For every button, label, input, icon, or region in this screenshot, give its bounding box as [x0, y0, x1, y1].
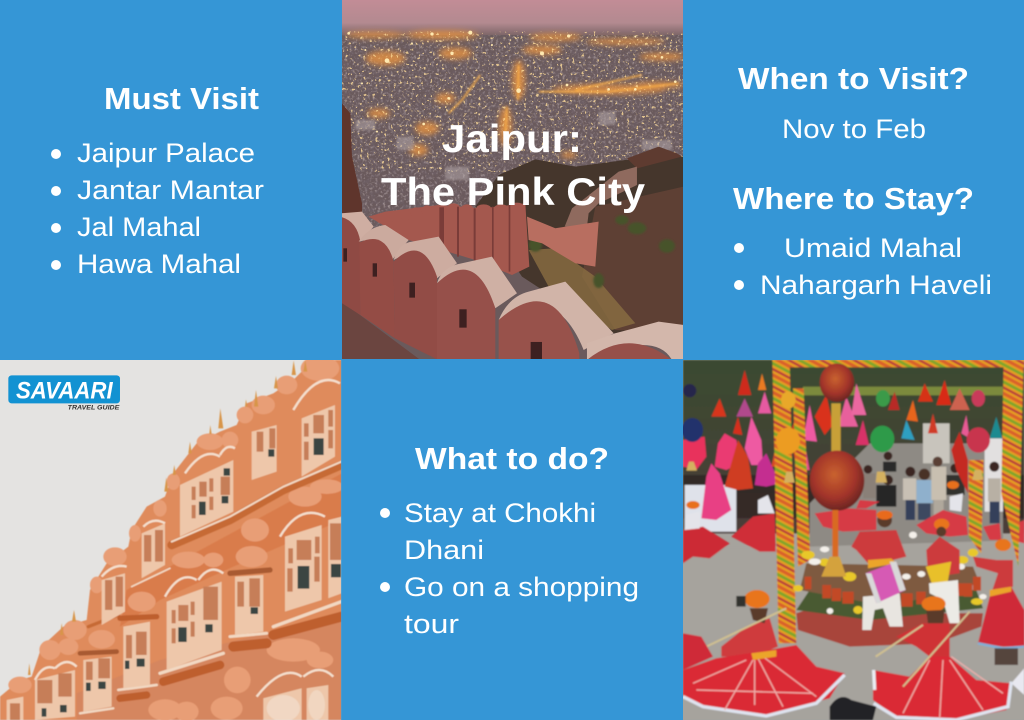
logo: Savaari travel guide: SAVAARI — [16, 378, 114, 405]
logo: Savaari travel guide: TRAVEL GUIDE — [68, 405, 120, 412]
hanging puppets — [683, 370, 1019, 520]
distant wall — [627, 147, 682, 168]
list: must visit places: Jantar Mantar — [77, 175, 264, 205]
list: activities: tour — [404, 609, 459, 639]
heading: when to visit: When to Visit? — [738, 61, 969, 96]
hillside — [475, 157, 683, 333]
panel: when and where — [733, 61, 992, 300]
photo: Rajasthani folk dancers — [682, 360, 1024, 720]
title: The Pink City — [381, 171, 645, 214]
panel: Hawa Mahal photo — [0, 356, 343, 720]
text: visit months: Nov to Feb — [782, 114, 926, 144]
heading: must visit: Must Visit — [104, 81, 259, 116]
list: must visit places: Jal Mahal — [77, 212, 201, 242]
list: hotels — [734, 233, 992, 300]
list: hotels: Nahargarh Haveli — [760, 270, 992, 300]
panel: must visit — [51, 81, 264, 279]
list: activities — [380, 498, 639, 639]
list: must visit places: Jaipur Palace — [77, 138, 255, 168]
dark window openings — [42, 438, 341, 717]
title: Jaipur: — [442, 118, 582, 161]
panel: city photo with title — [342, 0, 685, 360]
finials — [28, 360, 307, 675]
crowd — [863, 452, 1001, 523]
panel: festival dancers photo — [682, 360, 1024, 720]
list: activities: Stay at Chokhi — [404, 498, 596, 528]
heading: what to do: What to do? — [415, 441, 609, 476]
right dancer — [973, 539, 1024, 695]
list: hotels: Umaid Mahal — [784, 233, 962, 263]
list: activities: Go on a shopping — [404, 572, 639, 602]
photo: night view from Nahargarh fort wall — [342, 0, 685, 360]
list: must visit places — [51, 138, 264, 279]
list: must visit places: Hawa Mahal — [77, 249, 241, 279]
foreground dancers — [683, 590, 1011, 720]
hanging lanterns — [682, 363, 990, 577]
title — [381, 118, 645, 214]
near battlements — [342, 302, 420, 360]
left tower — [342, 103, 362, 213]
arches — [35, 380, 340, 697]
lattice panels — [10, 410, 341, 720]
list: activities: Dhani — [404, 535, 484, 565]
drummers — [851, 510, 960, 630]
shaded lower storeys — [120, 473, 342, 627]
heading: where to stay: Where to Stay? — [733, 181, 974, 216]
domes — [8, 356, 343, 720]
photo: Hawa Mahal facade — [0, 356, 343, 720]
flower planter — [793, 532, 987, 647]
logo: Savaari travel guide — [8, 375, 120, 412]
far dancers — [683, 481, 1024, 563]
horizontal bands — [80, 462, 341, 713]
ground — [683, 540, 1024, 720]
pillars — [772, 360, 1024, 643]
panel: what to do — [380, 441, 639, 639]
window frames — [7, 405, 342, 720]
